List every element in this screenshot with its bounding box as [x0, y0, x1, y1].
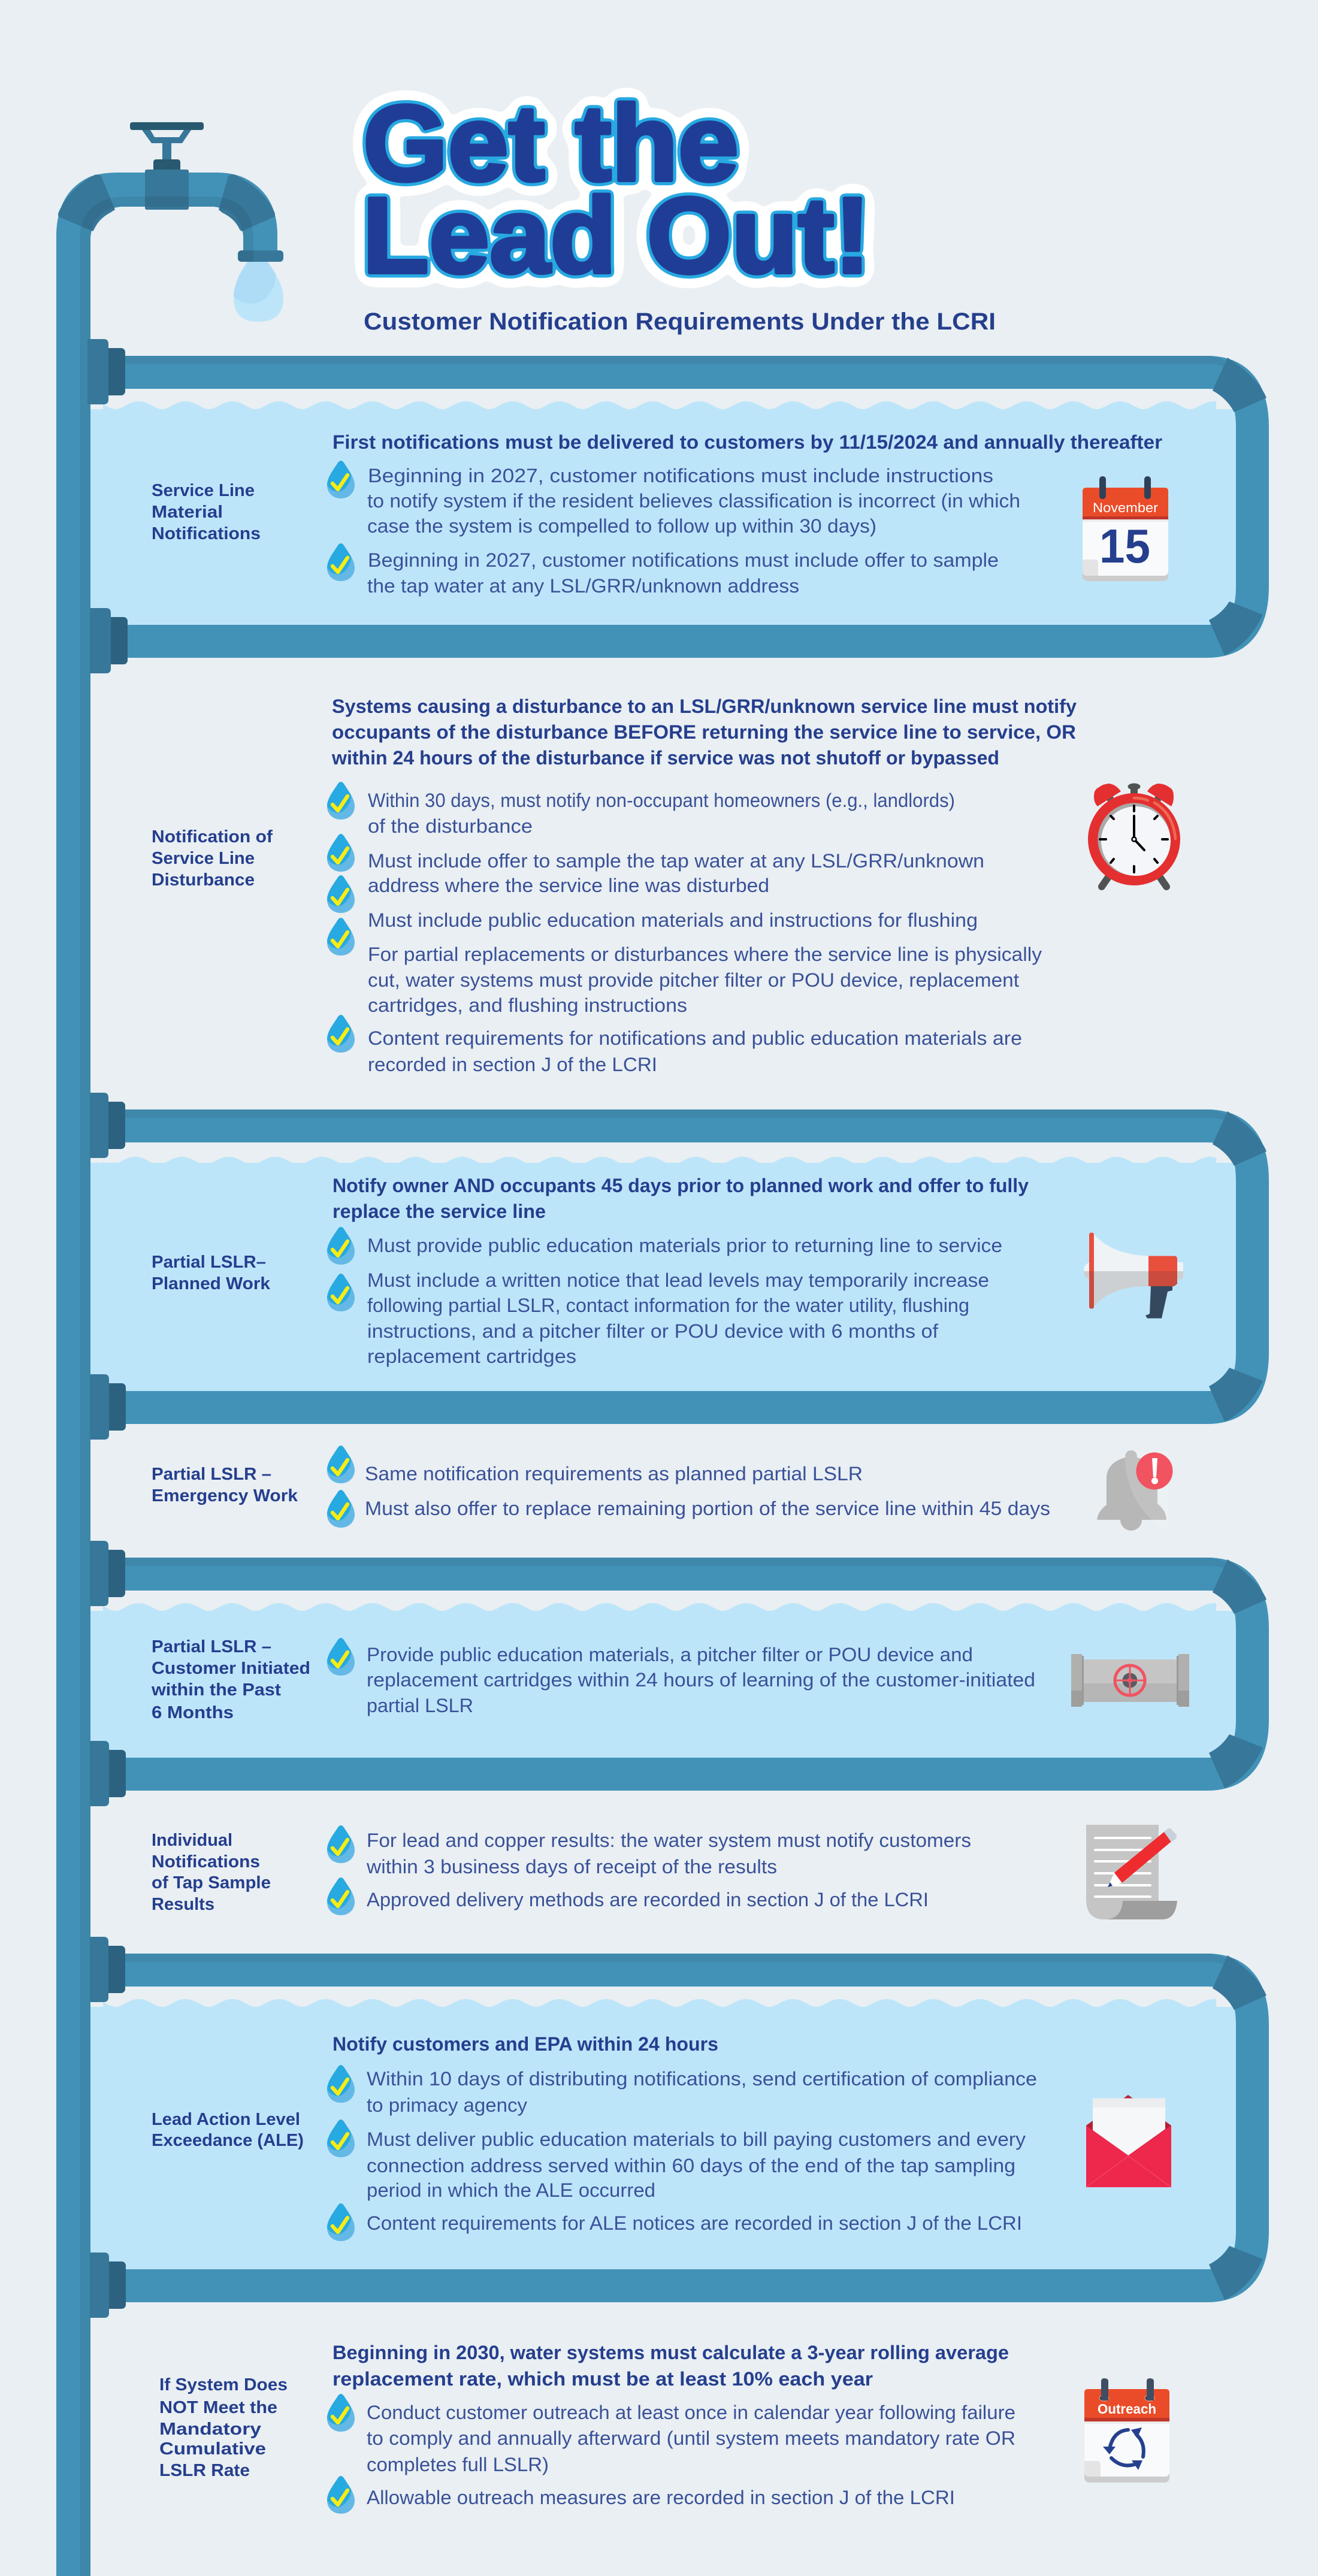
- bullet text: to notify system if the resident believes classification is incorrect (in which: [367, 490, 1020, 512]
- flanges: bottom band 1: [90, 608, 128, 673]
- label: Results: [152, 1895, 214, 1914]
- label: Material: [152, 503, 223, 522]
- label: Customer Initiated: [152, 1659, 310, 1678]
- heading: replacement rate, which must be at least 10% each year: [332, 2368, 873, 2390]
- bullet text: Allowable outreach measures are recorded in section J of the LCRI: [367, 2487, 955, 2508]
- heading: First notifications must be delivered to customers by 11/15/2024 and annually thereafter: [332, 431, 1162, 453]
- heading: Notify owner AND occupants 45 days prior to planned work and offer to fully: [332, 1175, 1029, 1196]
- bullet icon: [327, 875, 355, 913]
- bullet text: Same notification requirements as planned partial LSLR: [365, 1463, 863, 1484]
- bullet text: [368, 790, 955, 837]
- label: [152, 827, 273, 890]
- bullet text: [366, 1830, 971, 1877]
- bullet icon: [327, 461, 355, 498]
- bullet text: cartridges, and flushing instructions: [368, 994, 687, 1016]
- label: [152, 1831, 271, 1914]
- heading: replace the service line: [332, 1201, 546, 1222]
- label: Partial LSLR –: [152, 1465, 271, 1484]
- label: [152, 1465, 298, 1505]
- icon: open envelope: [1086, 2095, 1171, 2187]
- label: [159, 2375, 288, 2480]
- bullet icon: [327, 918, 355, 956]
- bullet icon: [327, 1825, 355, 1863]
- section: lead action level exceedance: [152, 2033, 1171, 2241]
- bullet text: Provide public education materials, a pitcher filter or POU device and: [367, 1644, 973, 1665]
- bullet text: Within 10 days of distributing notifications, send certification of compliance: [367, 2068, 1037, 2090]
- bullet text: replacement cartridges: [367, 1346, 576, 1367]
- bullet text: Must include a written notice that lead levels may temporarily increase: [367, 1269, 989, 1291]
- flanges: top band 1: [87, 339, 125, 404]
- icon: calendar November 15: [1083, 476, 1168, 581]
- bullet text: to primacy agency: [367, 2094, 527, 2116]
- heading: occupants of the disturbance BEFORE returning the service line to service, OR: [332, 721, 1076, 743]
- label: Partial LSLR–: [152, 1253, 266, 1272]
- icon: megaphone: [1084, 1233, 1183, 1319]
- bullet icon: [327, 1015, 355, 1053]
- icon: outreach calendar: Outreach: [1098, 2401, 1156, 2417]
- flanges: top band 3: [90, 1541, 125, 1606]
- bullet icon: [327, 1877, 355, 1915]
- bullet icon: [327, 834, 355, 872]
- bullet text: [367, 549, 999, 597]
- label: Notifications: [152, 524, 261, 543]
- label: Service Line: [152, 849, 255, 868]
- flanges: top band 4: [90, 1937, 125, 2002]
- bullet text: [368, 850, 984, 896]
- bullet icon: [327, 782, 355, 820]
- bullet text: For partial replacements or disturbances where the service line is physically: [368, 944, 1042, 965]
- faucet handle: [130, 122, 204, 170]
- bullet icon: [327, 543, 355, 581]
- bullet text: address where the service line was disturbed: [368, 875, 769, 896]
- bullet text: of the disturbance: [368, 815, 533, 837]
- bullet icon: [327, 1490, 355, 1528]
- bullet text: Approved delivery methods are recorded in section J of the LCRI: [367, 1889, 929, 1910]
- bullet text: partial LSLR: [367, 1695, 473, 1716]
- bullet icon: [327, 1446, 355, 1483]
- title: [362, 83, 870, 296]
- section: partial LSLR customer initiated: [151, 1637, 1189, 1722]
- bullet text: within 3 business days of receipt of the results: [366, 1856, 777, 1877]
- label: [152, 2110, 304, 2150]
- heading: [332, 1175, 1029, 1222]
- label: LSLR Rate: [159, 2461, 250, 2480]
- bullet text: Beginning in 2027, customer notifications must include instructions: [368, 465, 993, 486]
- bullet text: [367, 2402, 1015, 2475]
- bullet icon: [327, 2476, 355, 2514]
- bullet icon: [327, 2120, 355, 2157]
- label: Disturbance: [152, 870, 255, 890]
- bullet text: following partial LSLR, contact information for the water utility, flushing: [367, 1295, 969, 1316]
- title: Get the: [363, 83, 739, 204]
- bullet text: Must also offer to replace remaining portion of the service line within 45 days: [365, 1498, 1050, 1519]
- heading: within 24 hours of the disturbance if service was not shutoff or bypassed: [331, 747, 999, 769]
- panel: partial LSLR planned work band: [90, 1109, 1266, 1422]
- section: individual notifications of tap sample results: [152, 1825, 1177, 1919]
- water drop: [234, 262, 283, 322]
- bullet text: case the system is compelled to follow up within 30 days): [367, 515, 876, 537]
- title: Lead Out!: [362, 176, 870, 296]
- bullet text: to comply and annually afterward (until system meets mandatory rate OR: [367, 2427, 1015, 2449]
- faucet spout tip: [238, 250, 283, 262]
- bullet text: Content requirements for ALE notices are recorded in section J of the LCRI: [367, 2212, 1022, 2234]
- label: Emergency Work: [152, 1486, 298, 1505]
- bullet text: [367, 1644, 1035, 1716]
- bullet text: Beginning in 2027, customer notifications must include offer to sample: [368, 549, 999, 571]
- bullet text: the tap water at any LSL/GRR/unknown address: [367, 575, 799, 597]
- label: If System Does: [159, 2375, 288, 2394]
- bullet text: For lead and copper results: the water system must notify customers: [367, 1830, 971, 1851]
- bullet icon: [327, 2065, 355, 2103]
- bullet text: Must deliver public education materials to bill paying customers and every: [367, 2128, 1026, 2150]
- label: Cumulative: [159, 2439, 266, 2459]
- section: service line material notifications: [152, 431, 1168, 597]
- bullet text: [368, 1027, 1022, 1075]
- label: [152, 481, 261, 543]
- flanges: bottom band 3: [90, 1741, 126, 1806]
- faucet collar: [145, 170, 189, 210]
- heading: [331, 696, 1077, 769]
- icon: bell with alert: [1097, 1450, 1173, 1531]
- label: Individual: [152, 1831, 232, 1850]
- heading: Beginning in 2030, water systems must calculate a 3-year rolling average: [332, 2342, 1009, 2363]
- bullet text: connection address served within 60 days of the end of the tap sampling: [367, 2155, 1015, 2176]
- icon: paper and pencil: [1086, 1825, 1177, 1919]
- panel: lead action level exceedance band: [90, 1954, 1266, 2300]
- label: Service Line: [152, 481, 255, 500]
- label: Mandatory: [159, 2420, 261, 2439]
- flanges: bottom band 4: [90, 2253, 126, 2318]
- bullet icon: [327, 1227, 355, 1265]
- faucet elbow: left: [58, 174, 115, 231]
- bullet text: [367, 465, 1020, 537]
- bullet icon: [327, 1274, 355, 1311]
- label: [151, 1637, 310, 1722]
- pipe inner shading: [80, 196, 253, 2576]
- flanges: top band 2: [90, 1093, 125, 1158]
- panel: service line material band: [90, 356, 1266, 655]
- bullet text: Conduct customer outreach at least once in calendar year following failure: [367, 2402, 1015, 2423]
- label: Planned Work: [152, 1274, 271, 1293]
- icon: outreach calendar: [1084, 2378, 1169, 2483]
- label: Partial LSLR –: [152, 1637, 271, 1656]
- label: Notifications: [152, 1852, 260, 1871]
- icon: pipe valve: [1071, 1654, 1189, 1707]
- flanges: bottom band 2: [90, 1374, 126, 1440]
- bullet icon: [327, 2394, 355, 2432]
- section: if system does not meet cumulative LSLR rate: [159, 2342, 1169, 2514]
- label: 6 Months: [152, 1703, 234, 1722]
- bullet text: Must include offer to sample the tap water at any LSL/GRR/unknown: [368, 850, 984, 872]
- bullet text: [368, 944, 1042, 1016]
- bullet icon: [327, 1638, 355, 1676]
- section: partial LSLR emergency work: [152, 1446, 1173, 1531]
- bullet text: Must include public education materials and instructions for flushing: [368, 909, 978, 931]
- label: within the Past: [151, 1680, 281, 1700]
- section: notification of service line disturbance: [152, 696, 1180, 1075]
- bullet text: replacement cartridges within 24 hours of learning of the customer-initiated: [367, 1669, 1035, 1691]
- label: NOT Meet the: [159, 2398, 277, 2417]
- bullet text: Within 30 days, must notify non-occupant homeowners (e.g., landlords): [368, 790, 955, 811]
- bullet text: instructions, and a pitcher filter or POU device with 6 months of: [367, 1320, 938, 1342]
- bullet text: recorded in section J of the LCRI: [368, 1054, 657, 1075]
- heading: Systems causing a disturbance to an LSL/GRR/unknown service line must notify: [332, 696, 1077, 717]
- bullet text: cut, water systems must provide pitcher filter or POU device, replacement: [368, 969, 1019, 991]
- label: Lead Action Level: [152, 2110, 300, 2129]
- bullet text: [367, 2128, 1026, 2201]
- icon: alarm clock: [1088, 784, 1180, 887]
- main vertical pipe with faucet: [56, 122, 283, 2576]
- icon: calendar November 15: 15: [1099, 519, 1150, 573]
- bullet text: [367, 2068, 1037, 2116]
- panel: customer initiated band: [90, 1558, 1266, 1788]
- bullet text: [367, 1269, 989, 1367]
- bullet text: period in which the ALE occurred: [367, 2179, 655, 2201]
- heading: [332, 2342, 1009, 2390]
- bullet text: Content requirements for notifications and public education materials are: [368, 1027, 1022, 1049]
- label: Notification of: [152, 827, 273, 846]
- label: of Tap Sample: [152, 1873, 271, 1892]
- subtitle: Customer Notification Requirements Under the LCRI: [364, 309, 996, 335]
- faucet elbow: right: [219, 174, 275, 231]
- label: [152, 1253, 271, 1293]
- bullet text: completes full LSLR): [367, 2454, 549, 2475]
- section: partial LSLR planned work: [152, 1175, 1183, 1367]
- label: Exceedance (ALE): [152, 2131, 304, 2150]
- icon: calendar November 15: November: [1093, 500, 1158, 515]
- bullet icon: [327, 2203, 355, 2241]
- bullet text: Must provide public education materials prior to returning line to service: [367, 1235, 1002, 1256]
- heading: Notify customers and EPA within 24 hours: [332, 2033, 718, 2055]
